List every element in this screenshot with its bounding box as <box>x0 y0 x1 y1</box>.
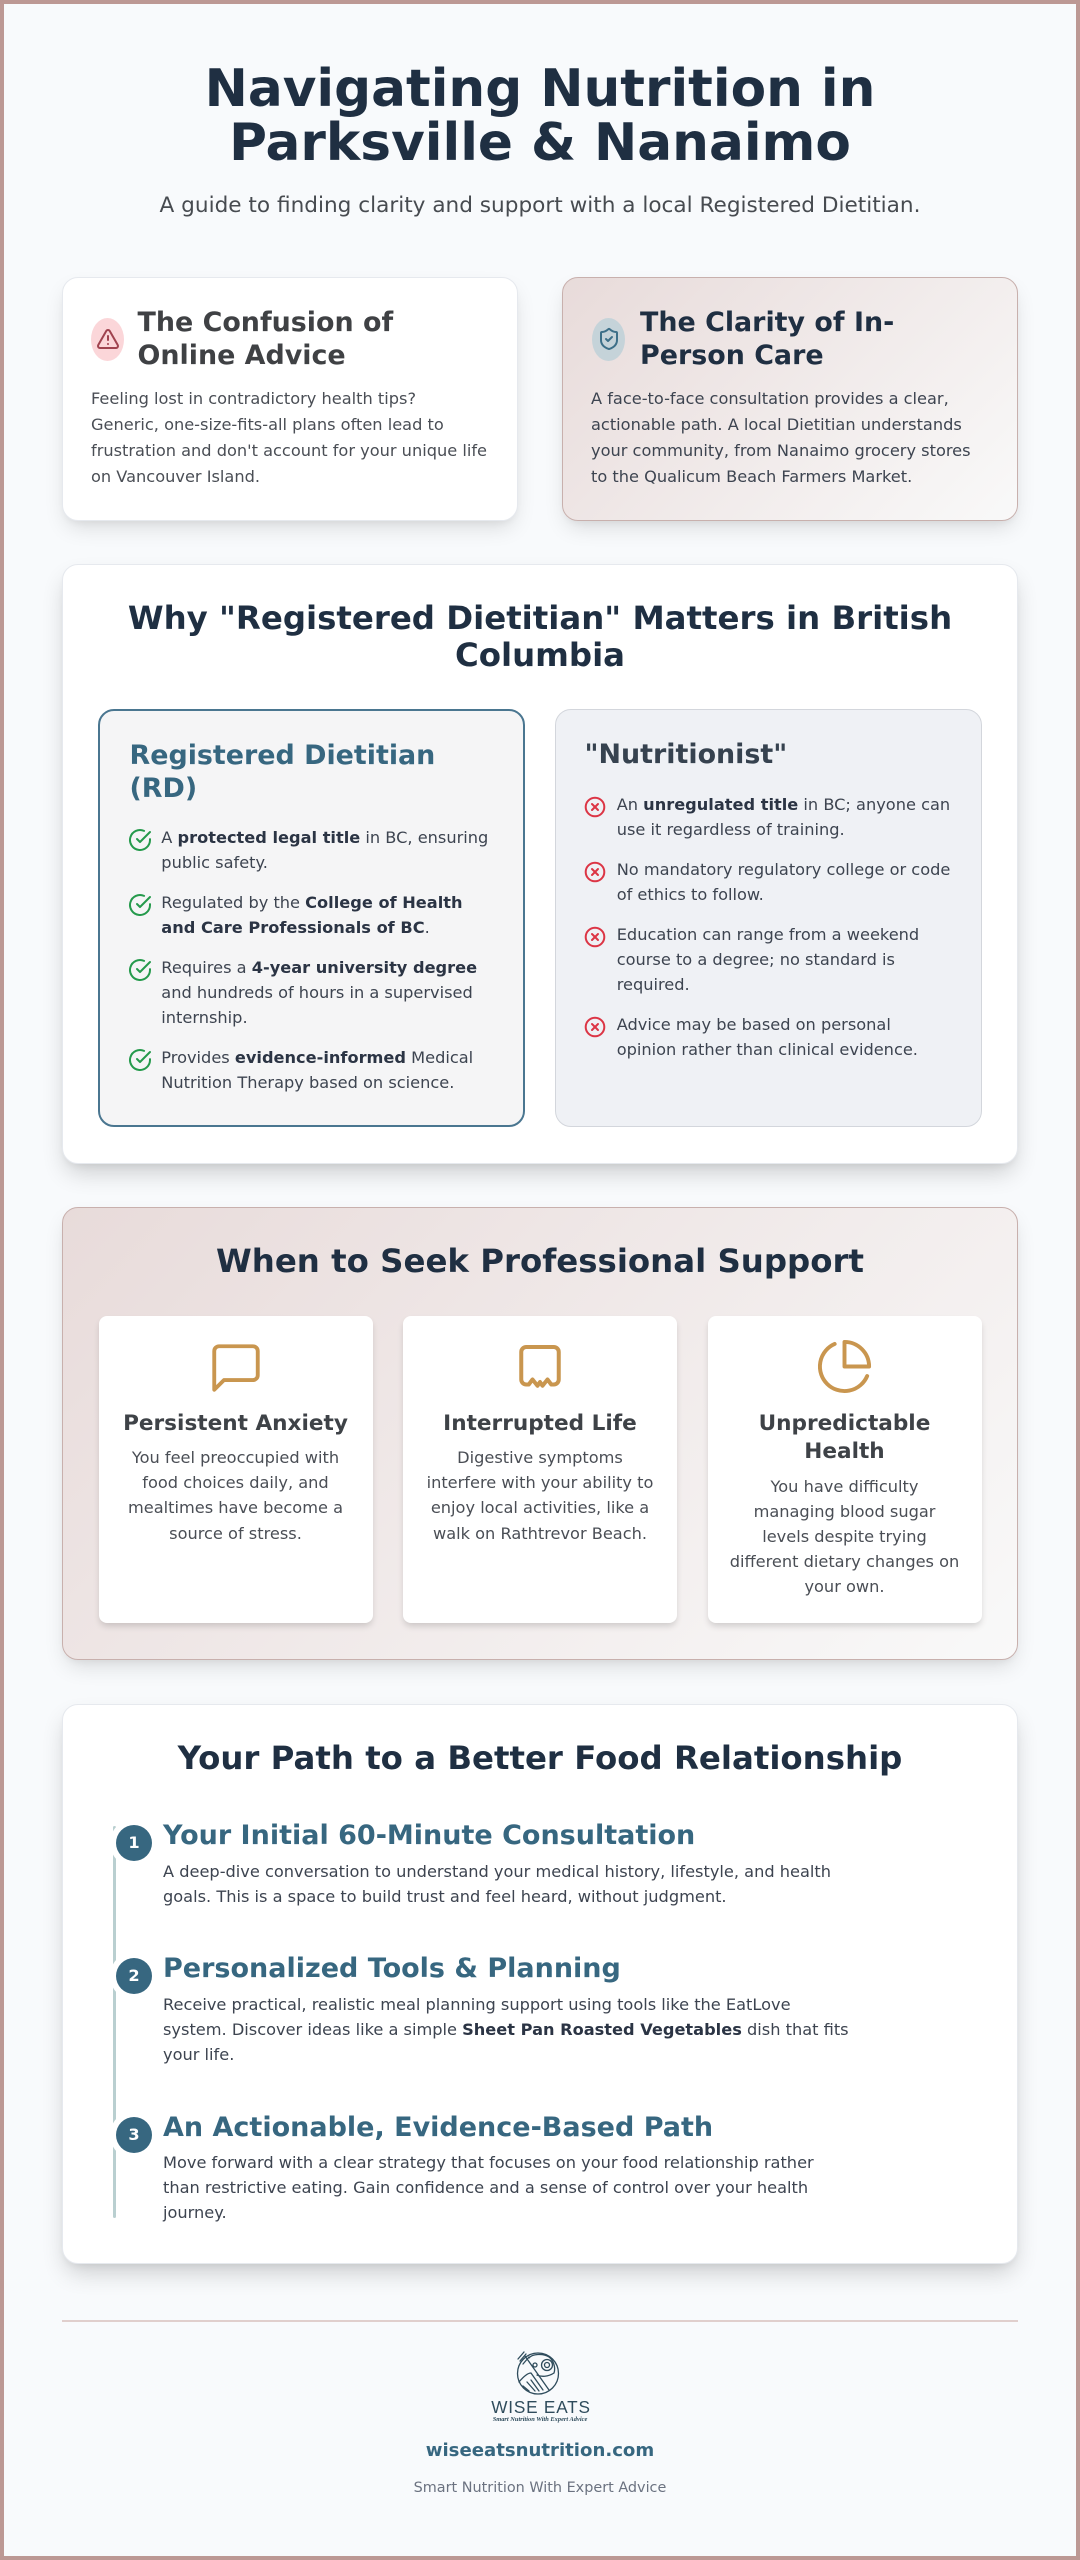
text: nutritionist item 1: An unregulated title in BC; anyone can <box>617 795 950 814</box>
logo wordmark: WISE EATS <box>491 2396 591 2416</box>
text: nutritionist item 2: of ethics to follow. <box>617 885 764 904</box>
step 2 number: 2 <box>128 1966 140 1985</box>
heading: unpredictable health: Unpredictable <box>759 1411 930 1436</box>
icon: check 2 <box>128 894 151 916</box>
panel: your path to a better food relationship <box>62 1704 1018 2264</box>
step 2 number <box>116 1958 152 1994</box>
text: rd item 2 <box>161 893 463 937</box>
text: rd item 3 <box>161 958 477 1027</box>
text: interrupted life <box>427 1448 653 1543</box>
panel: when to seek professional support <box>62 1207 1018 1660</box>
panel: nutritionist column <box>555 709 982 1127</box>
text: interrupted life: enjoy local activities, like a <box>431 1498 649 1517</box>
panel: why registered dietitian matters <box>62 564 1018 1164</box>
step 1 text: A deep-dive conversation to understand your medical history, lifestyle, and health <box>163 1862 831 1880</box>
heading: persistent anxiety: Persistent Anxiety <box>123 1411 348 1436</box>
text: nutritionist item 3: course to a degree; no standard is <box>617 950 895 969</box>
footer website: wiseeatsnutrition.com <box>426 2440 654 2461</box>
card: interrupted life <box>403 1316 677 1623</box>
logo: wise eats <box>491 2351 591 2423</box>
icon: x 2 <box>584 862 606 882</box>
text: nutritionist item 3: Education can range from a weekend <box>617 925 919 944</box>
step 2 text: system. Discover ideas like a simple Sheet Pan Roasted Vegetables dish that fits <box>163 2020 849 2039</box>
text: clarity card: actionable path. A local Dietitian understands <box>591 415 962 434</box>
text: interrupted life: Digestive symptoms <box>457 1448 623 1467</box>
icon: x 1 <box>584 796 606 818</box>
panel: registered dietitian column <box>98 709 525 1127</box>
panel: the clarity of in-person care <box>562 277 1018 521</box>
text: interrupted life: walk on Rathtrevor Beach. <box>433 1524 647 1543</box>
text: persistent anxiety: mealtimes have become a <box>128 1498 343 1517</box>
text: nutritionist item 4 <box>616 1015 918 1059</box>
text: nutritionist item 1: use it regardless of training. <box>617 820 845 839</box>
icon: shield check <box>592 318 625 360</box>
text: persistent anxiety: You feel preoccupied with <box>132 1448 339 1467</box>
title: Parksville & Nanaimo <box>229 113 851 173</box>
text: nutritionist item 4: opinion rather than clinical evidence. <box>617 1040 918 1059</box>
icon: speech bubble <box>212 1344 260 1392</box>
text: rd item 2: and Care Professionals of BC. <box>161 918 430 937</box>
heading: registered dietitian <box>130 740 435 804</box>
text: nutritionist item 2 <box>617 860 950 904</box>
heading: unpredictable health <box>759 1411 930 1464</box>
step 2 text: Receive practical, realistic meal planning support using tools like the EatLove <box>163 1995 791 2014</box>
icon: warning triangle <box>91 318 124 360</box>
text: rd item 3: Requires a 4-year university degree <box>161 958 477 977</box>
heading: interrupted life: Interrupted Life <box>443 1411 637 1436</box>
text: clarity card: to the Qualicum Beach Farmers Market. <box>591 467 912 486</box>
text: clarity card: your community, from Nanaimo grocery stores <box>591 441 971 460</box>
step 3 text <box>162 2153 814 2222</box>
timeline line <box>113 1826 116 2218</box>
step 1 heading: Your Initial 60-Minute Consultation <box>163 1820 695 1850</box>
text: confusion card: Feeling lost in contradictory health tips? <box>91 388 416 408</box>
icon: x 3 <box>584 926 606 948</box>
step 3 text: Move forward with a clear strategy that focuses on your food relationship rather <box>163 2153 814 2172</box>
text: clarity card: A face-to-face consultation provides a clear, <box>591 388 949 408</box>
step 2 heading: Personalized Tools & Planning <box>163 1953 621 1984</box>
text: persistent anxiety <box>128 1448 343 1543</box>
step 1 number: 1 <box>128 1833 140 1852</box>
heading: when to seek professional support: When to Seek Professional Support <box>216 1242 864 1280</box>
icon: tag with zigzag edge <box>519 1345 561 1388</box>
text: rd item 1: A protected legal title in BC, ensuring <box>161 828 488 847</box>
subtitle: A guide to finding clarity and support with a local Registered Dietitian. <box>160 192 920 218</box>
step 3 number: 3 <box>128 2124 140 2144</box>
heading: why registered dietitian matters <box>128 599 952 674</box>
icon: check 1 <box>128 829 151 851</box>
text: nutritionist item 3: required. <box>617 975 690 994</box>
icon: x 4 <box>584 1016 606 1038</box>
step 3 text: journey. <box>163 2203 227 2222</box>
text: confusion card: Generic, one-size-fits-all plans often lead to <box>91 415 444 434</box>
text: persistent anxiety: food choices daily, and <box>142 1473 329 1492</box>
text: rd item 4: Provides evidence-informed Medical <box>161 1048 473 1067</box>
text: unpredictable health: different dietary changes on <box>730 1552 959 1571</box>
heading: clarity card: Person Care <box>640 340 824 371</box>
step 3 heading: An Actionable, Evidence-Based Path <box>163 2112 713 2142</box>
card: persistent anxiety <box>98 1316 372 1623</box>
icon: check 3 <box>128 959 151 981</box>
text: nutritionist item 4: Advice may be based on personal <box>617 1015 891 1034</box>
heading: confusion card <box>138 307 394 371</box>
heading: confusion card: The Confusion of <box>138 307 393 338</box>
text: nutritionist item 2: No mandatory regulatory college or code <box>617 860 950 879</box>
footer divider <box>62 2320 1018 2322</box>
text: rd item 1: public safety. <box>161 853 268 872</box>
text: rd item 4 <box>161 1048 473 1092</box>
heading: registered dietitian: Registered Dietitian <box>130 740 435 770</box>
heading: why registered dietitian matters: Why "Registered Dietitian" Matters in British <box>128 599 952 637</box>
title: Navigating Nutrition in <box>205 59 875 119</box>
text: nutritionist item 1 <box>616 795 950 839</box>
text: rd item 2: Regulated by the College of Health <box>161 893 463 912</box>
step 2 text <box>163 1995 849 2064</box>
step 1 text <box>163 1862 831 1906</box>
heading: nutritionist: "Nutritionist" <box>584 739 787 770</box>
text: confusion card: frustration and don't account for your unique life <box>91 441 487 460</box>
step 3 text: than restrictive eating. Gain confidence and a sense of control over your health <box>163 2178 808 2197</box>
icon: pie chart <box>818 1340 872 1393</box>
heading: registered dietitian: (RD) <box>130 772 197 804</box>
footer tagline: Smart Nutrition With Expert Advice <box>414 2480 666 2496</box>
heading: clarity card: The Clarity of In- <box>640 307 894 338</box>
heading: clarity card <box>640 307 894 371</box>
text: rd item 1 <box>161 828 488 872</box>
card: unpredictable health <box>708 1316 982 1623</box>
text: rd item 3: and hundreds of hours in a supervised <box>161 983 473 1002</box>
text: interrupted life: interfere with your ability to <box>427 1473 653 1492</box>
text: rd item 3: internship. <box>161 1008 248 1027</box>
text: unpredictable health: managing blood sugar <box>754 1502 935 1521</box>
heading: unpredictable health: Health <box>804 1439 885 1464</box>
text: persistent anxiety: source of stress. <box>169 1524 302 1543</box>
heading: your path: Your Path to a Better Food Relationship <box>178 1739 902 1777</box>
heading: confusion card: Online Advice <box>138 340 346 371</box>
text: confusion card: on Vancouver Island. <box>91 467 260 486</box>
text: clarity card <box>591 388 971 486</box>
step 1 text: goals. This is a space to build trust and feel heard, without judgment. <box>163 1887 727 1906</box>
text: unpredictable health <box>730 1477 959 1596</box>
text: confusion card <box>91 388 487 486</box>
text: unpredictable health: You have difficulty <box>771 1477 918 1496</box>
text: unpredictable health: your own. <box>804 1577 885 1596</box>
step 3 number <box>116 2116 152 2152</box>
logo tagline: Smart Nutrition With Expert Advice <box>493 2416 587 2423</box>
text: nutritionist item 3 <box>617 925 919 994</box>
text: rd item 4: Nutrition Therapy based on science. <box>161 1073 454 1092</box>
icon: check 4 <box>128 1049 151 1071</box>
heading: why registered dietitian matters: Columbia <box>455 636 625 674</box>
icon: owl and fork roundel <box>516 2351 560 2395</box>
step 1 number <box>116 1825 152 1861</box>
step 2 text: your life. <box>163 2045 234 2064</box>
panel: the confusion of online advice <box>62 277 518 521</box>
text: unpredictable health: levels despite trying <box>762 1527 927 1546</box>
title <box>205 59 875 173</box>
